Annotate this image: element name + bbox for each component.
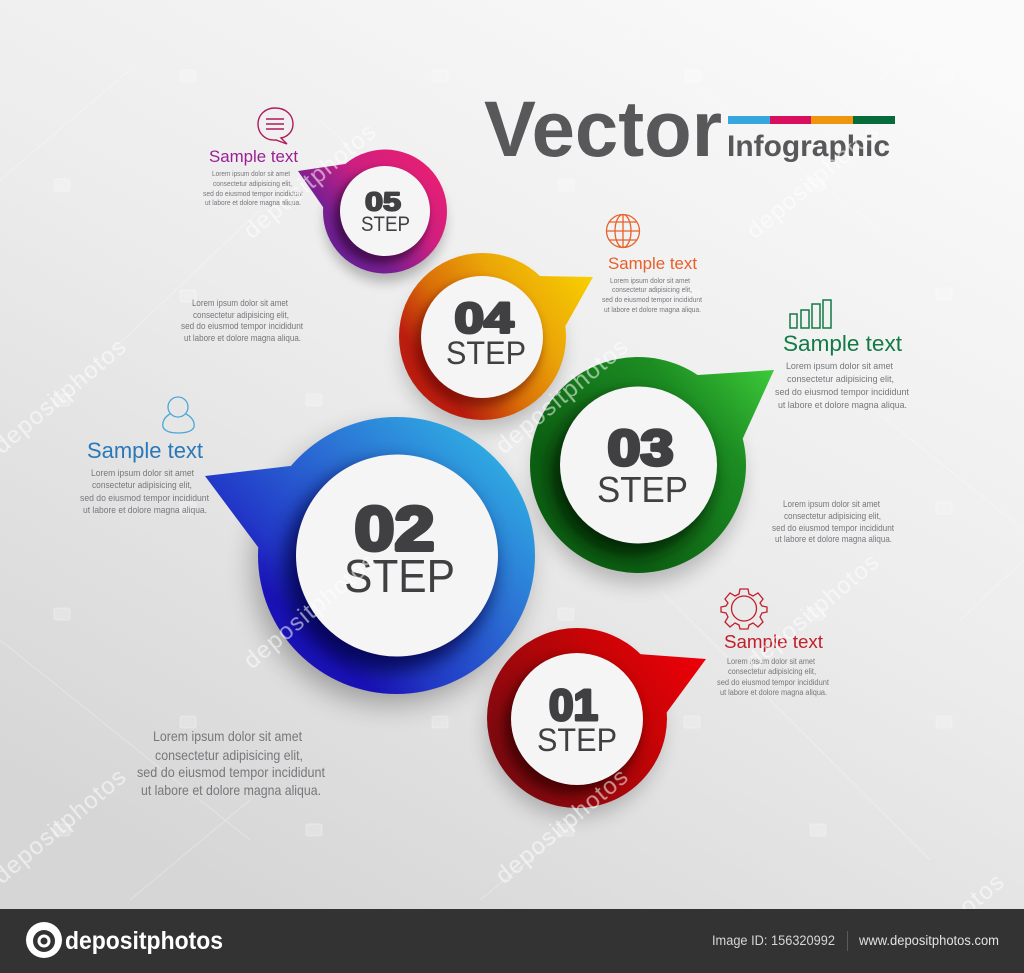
free text block: left middle: consectetur adipisicing elit, <box>193 310 289 321</box>
free text block: left middle <box>181 298 303 344</box>
depositphotos watermarks: depositphotos <box>239 548 382 675</box>
badge: STEP <box>446 335 526 371</box>
free text block: left middle: ut labore et dolore magna aliqua. <box>184 333 301 344</box>
title <box>484 84 895 173</box>
icon: globe <box>606 214 640 248</box>
image id: Image ID: 156320992 <box>712 933 835 948</box>
free text block: right middle: consectetur adipisicing elit, <box>784 511 881 522</box>
description <box>717 657 830 697</box>
free text block: right middle <box>772 499 894 545</box>
depositphotos watermarks: depositphotos <box>742 118 885 245</box>
description: ut labore et dolore magna aliqua. <box>83 505 207 516</box>
description: consectetur adipisicing elit, <box>728 667 816 676</box>
step 04 panel <box>399 214 703 430</box>
step 01 panel <box>487 589 830 817</box>
description: consectetur adipisicing elit, <box>612 285 692 294</box>
free text block: bottom left: consectetur adipisicing elit, <box>155 747 303 763</box>
description: consectetur adipisicing elit, <box>92 480 192 491</box>
description: Lorem ipsum dolor sit amet <box>786 361 893 372</box>
description: sed do eiusmod tempor incididunt <box>602 295 703 304</box>
badge: STEP <box>597 469 688 510</box>
heading: Vector: Vector <box>484 84 722 173</box>
icon: camera logo <box>26 922 62 958</box>
badge: STEP <box>344 550 455 602</box>
badge: 05 <box>365 186 401 216</box>
icon: gear <box>721 589 767 629</box>
badge <box>487 628 706 817</box>
description: ut labore et dolore magna aliqua. <box>604 305 701 314</box>
free text block: bottom left: sed do eiusmod tempor incididunt <box>137 764 325 780</box>
description: Lorem ipsum dolor sit amet <box>91 468 194 479</box>
badge: STEP <box>361 213 410 236</box>
footer bar <box>0 909 1024 973</box>
description: sed do eiusmod tempor incididunt <box>80 493 209 504</box>
badge <box>399 253 593 430</box>
badge: STEP <box>537 722 617 758</box>
icon: speech bubble <box>258 108 293 144</box>
label: sample text: Sample text <box>724 631 824 652</box>
free text block: right middle: ut labore et dolore magna aliqua. <box>775 534 892 545</box>
free text block: left middle: Lorem ipsum dolor sit amet <box>192 298 288 309</box>
free text block: bottom left <box>137 728 325 798</box>
step 02 panel <box>80 397 535 704</box>
badge: 01 <box>549 681 598 730</box>
description: consectetur adipisicing elit, <box>787 374 894 385</box>
website: www.depositphotos.com <box>858 933 999 948</box>
depositphotos watermarks: depositphotos <box>491 763 634 890</box>
description: ut labore et dolore magna aliqua. <box>720 688 827 697</box>
step 03 panel <box>530 300 909 584</box>
depositphotos watermarks: depositphotos <box>742 548 885 675</box>
label: sample text: Sample text <box>608 254 697 273</box>
description: sed do eiusmod tempor incididunt <box>203 189 304 198</box>
badge: 03 <box>608 420 674 476</box>
colour bar <box>728 116 895 124</box>
description: Lorem ipsum dolor sit amet <box>727 657 816 666</box>
label: sample text: Sample text <box>87 438 203 463</box>
free text block: bottom left: Lorem ipsum dolor sit amet <box>153 728 302 744</box>
description <box>80 468 209 516</box>
icon: bar chart <box>790 300 831 328</box>
description <box>602 276 703 314</box>
description: ut labore et dolore magna aliqua. <box>205 198 301 207</box>
label: sample text: Sample text <box>783 331 903 356</box>
description: Lorem ipsum dolor sit amet <box>610 276 691 285</box>
badge <box>298 150 447 282</box>
description: sed do eiusmod tempor incididunt <box>717 678 830 687</box>
description: Lorem ipsum dolor sit amet <box>212 169 291 178</box>
free text block: right middle: sed do eiusmod tempor incididunt <box>772 523 894 534</box>
badge <box>530 357 774 584</box>
description: consectetur adipisicing elit, <box>213 179 292 188</box>
depositphotos watermarks: depositphotos <box>491 333 634 460</box>
badge <box>205 417 535 704</box>
icon: person <box>163 397 194 433</box>
subheading: Infographic: Infographic <box>727 130 890 163</box>
label: sample text: Sample text <box>209 147 298 166</box>
badge: 04 <box>454 294 514 342</box>
description <box>775 361 909 411</box>
free text block: bottom left: ut labore et dolore magna aliqua. <box>141 782 321 798</box>
step 05 panel <box>203 108 447 282</box>
description: sed do eiusmod tempor incididunt <box>775 387 909 398</box>
description: ut labore et dolore magna aliqua. <box>778 400 907 411</box>
free text block: left middle: sed do eiusmod tempor incididunt <box>181 321 303 332</box>
depositphotos watermarks: depositphotos <box>239 118 382 245</box>
badge: 02 <box>354 495 434 564</box>
free text block: right middle: Lorem ipsum dolor sit amet <box>783 499 880 510</box>
description <box>203 169 304 207</box>
brand name: depositphotos <box>65 927 223 955</box>
